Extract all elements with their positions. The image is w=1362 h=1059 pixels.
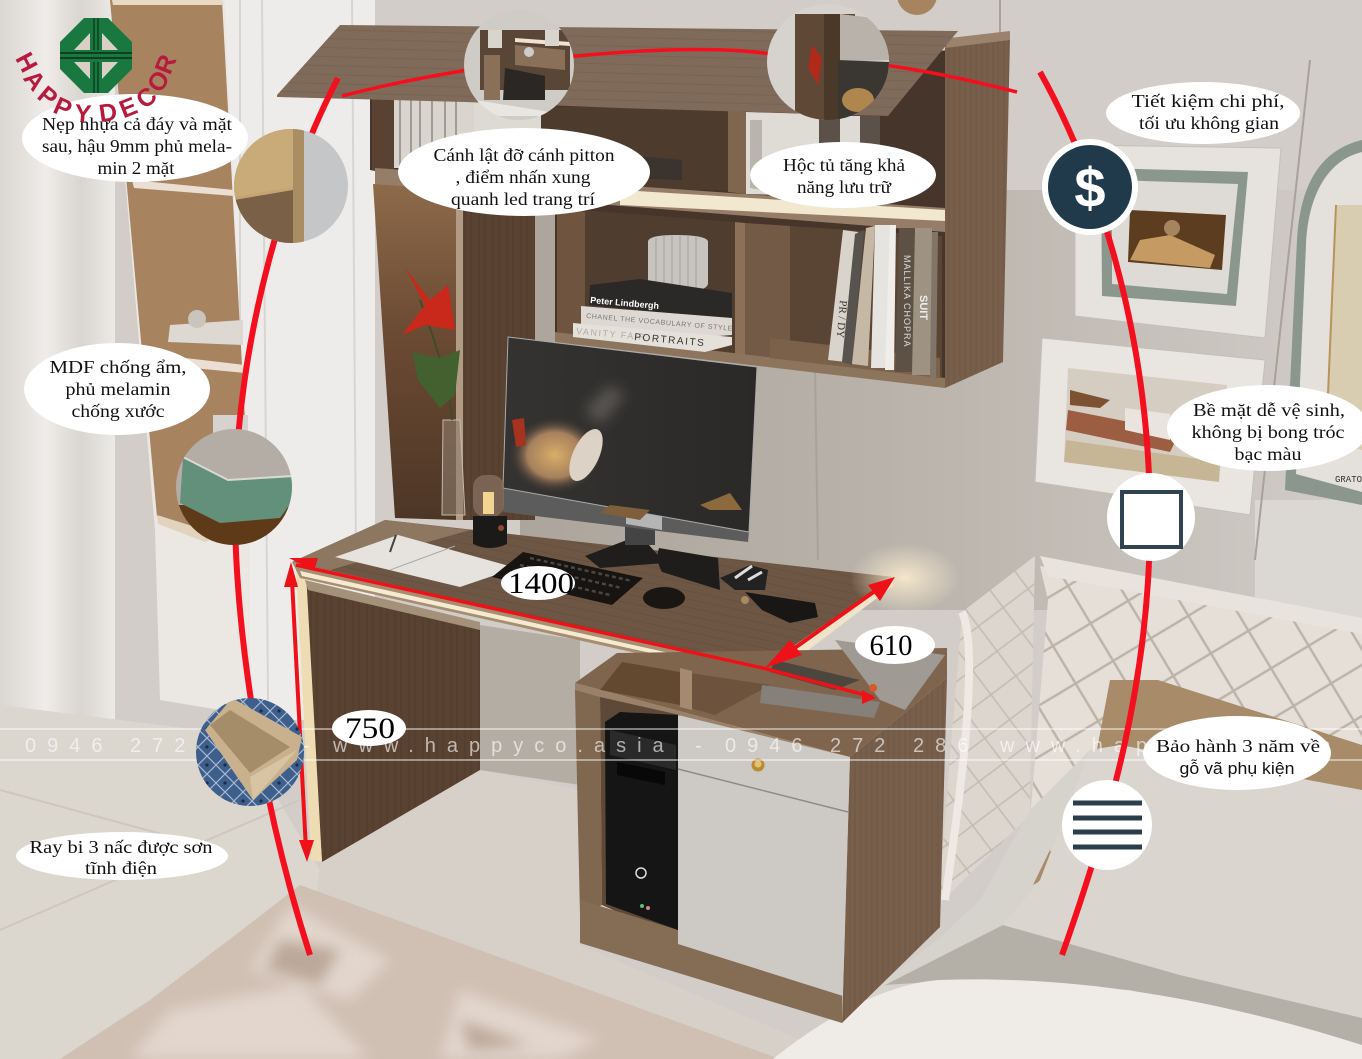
upper compartments — [541, 107, 880, 200]
books top left — [372, 97, 542, 170]
callout: edge banding — [22, 94, 248, 182]
hutch cabinet — [277, 25, 1010, 520]
dimension label 610: 610 — [870, 629, 912, 662]
notebook — [335, 535, 516, 587]
callout: lift door: quanh led trang trí — [451, 189, 595, 209]
logo wordmark — [10, 48, 182, 129]
callout: storage — [750, 142, 936, 208]
logo mark — [60, 18, 132, 93]
stacked books: Peter Lindbergh — [590, 295, 659, 311]
keyboard — [492, 552, 643, 605]
framed picture upper right — [1075, 145, 1281, 338]
callout: edge banding: min 2 mặt — [98, 158, 174, 178]
side panel — [842, 678, 947, 1023]
left column — [373, 184, 535, 520]
dimension label 1400: 1400 — [508, 567, 574, 600]
grey sheet band — [885, 925, 1362, 1045]
dimension label 750: 750 — [345, 712, 395, 745]
callout: cost saving: tối ưu không gian — [1139, 113, 1279, 133]
desk front edge light — [292, 562, 766, 682]
desk right edge — [762, 577, 893, 682]
vase — [648, 235, 708, 293]
magazines on shelf — [760, 640, 945, 718]
stacked books: PORTRAITS — [634, 332, 706, 349]
callout: cost saving: Tiết kiệm chi phí, — [1132, 91, 1284, 111]
callout: moisture resistant MDF: MDF chống ẩm, — [50, 357, 186, 377]
lamp — [473, 475, 507, 548]
framed picture lower right — [1035, 338, 1265, 515]
callout: drawer rails: Ray bi 3 nấc được sơn — [30, 837, 212, 857]
callout: easy cleaning: không bị bong tróc — [1192, 422, 1344, 442]
white pillow — [1003, 745, 1362, 1018]
right books: PR / DY — [834, 300, 849, 339]
photo circle: edge banding — [234, 129, 349, 244]
cabinet interior — [575, 690, 602, 915]
stacked books: CHANEL THE VOCABULARY OF STYLE — [586, 313, 733, 333]
photo circle: mug at top — [897, 0, 937, 15]
dimension label 750 — [332, 710, 406, 746]
callout: edge banding: Nẹp nhựa cả đáy và mặt — [42, 114, 232, 134]
callout: moisture resistant MDF: phủ melamin — [66, 379, 170, 399]
stacked books — [573, 279, 733, 352]
watermark band: - — [695, 735, 713, 757]
cabinet top — [575, 648, 947, 757]
callout: easy cleaning: bạc màu — [1234, 444, 1302, 464]
logo wordmark: O — [142, 66, 176, 98]
callout: easy cleaning: Bề mặt dễ vệ sinh, — [1193, 400, 1345, 420]
brown pillow — [1033, 680, 1362, 885]
callout: moisture resistant MDF — [24, 343, 210, 435]
arched mirror — [1285, 140, 1362, 505]
desk — [292, 520, 960, 862]
stacked books: VANITY FAIR — [576, 326, 647, 342]
callout: easy cleaning — [1167, 385, 1362, 471]
mouse — [643, 587, 685, 609]
flowers and glass vase — [402, 268, 465, 515]
lit shelf — [375, 168, 945, 232]
red connector curves — [235, 50, 1150, 955]
icon: square badge — [1107, 473, 1195, 561]
logo wordmark: A — [18, 65, 51, 96]
photo circle: drawer runner — [196, 698, 304, 808]
desk accessories — [335, 475, 818, 623]
toys — [720, 565, 818, 623]
icon: dollar badge: $ — [1074, 156, 1106, 219]
lower compartments — [555, 208, 945, 388]
callout: cost saving — [1106, 82, 1300, 144]
icon: dollar badge — [1042, 139, 1138, 235]
logo wordmark: P — [49, 92, 76, 124]
callout: warranty: gỗ vã phụ kiện — [1180, 759, 1294, 778]
watermark band — [0, 729, 1362, 760]
desk left panel — [304, 582, 480, 862]
callout: edge banding: sau, hậu 9mm phủ mela- — [42, 136, 232, 156]
photo circle: cabinet detail — [767, 14, 889, 120]
callout: lift door: Cánh lật đỡ cánh pitton — [434, 145, 614, 165]
callout: moisture resistant MDF: chống xước — [72, 401, 164, 421]
logo — [10, 18, 182, 129]
monitor — [503, 337, 757, 568]
rug — [50, 880, 790, 1059]
logo wordmark: D — [97, 98, 119, 128]
bed sheet — [773, 750, 1362, 1059]
callout: drawer rails — [16, 832, 228, 880]
interior — [370, 50, 950, 385]
light glow — [850, 543, 960, 613]
callout: storage: năng lưu trữ — [797, 177, 892, 197]
right books: MALLIKA CHOPRA — [902, 255, 912, 348]
icon: lines badge — [1062, 780, 1152, 870]
callout: storage: Hộc tủ tăng khả — [783, 155, 905, 175]
right books: SUIT — [917, 295, 929, 320]
right books — [828, 225, 938, 378]
watermark band: 0946 272 286 — [725, 735, 979, 757]
callout: drawer rails: tĩnh điện — [85, 858, 157, 878]
white door and drawer — [678, 715, 850, 996]
watermark band: - — [303, 735, 321, 757]
dimension label 610 — [855, 626, 935, 664]
headboard — [938, 556, 1362, 905]
arched mirror: GRATO — [1335, 475, 1362, 485]
logo wordmark: E — [115, 92, 141, 124]
duvet — [773, 979, 1362, 1059]
cabinet base — [580, 900, 842, 1023]
bed — [773, 556, 1362, 1059]
lift-up door — [277, 25, 958, 116]
logo wordmark: H — [10, 48, 43, 77]
logo wordmark: R — [150, 51, 182, 78]
dimension arrow 610 — [765, 577, 895, 668]
logo wordmark: P — [32, 81, 63, 113]
photo circle: hutch detail — [464, 26, 574, 120]
watermark band: www.happyco.asia — [999, 735, 1342, 757]
callout: warranty: Bảo hành 3 năm về — [1156, 736, 1320, 756]
lower cabinet — [575, 640, 947, 1023]
callout: lift door — [398, 128, 650, 216]
desk top — [292, 520, 893, 668]
logo wordmark: C — [131, 81, 163, 114]
watermark band: www.happyco.asia — [332, 735, 675, 757]
callout: warranty — [1143, 716, 1331, 790]
callout: lift door: , điểm nhấn xung — [456, 167, 590, 187]
logo wordmark: Y — [73, 99, 93, 129]
shelving niche on the left — [110, 0, 248, 542]
dimension arrow 1400 — [289, 558, 876, 704]
right side panel — [945, 31, 1010, 388]
computer tower — [605, 712, 678, 930]
watermark band: 0946 272 286 — [25, 735, 279, 757]
speaker — [658, 548, 720, 590]
photo circle: MDF board — [176, 429, 294, 547]
dimension arrow 750 — [284, 562, 314, 862]
